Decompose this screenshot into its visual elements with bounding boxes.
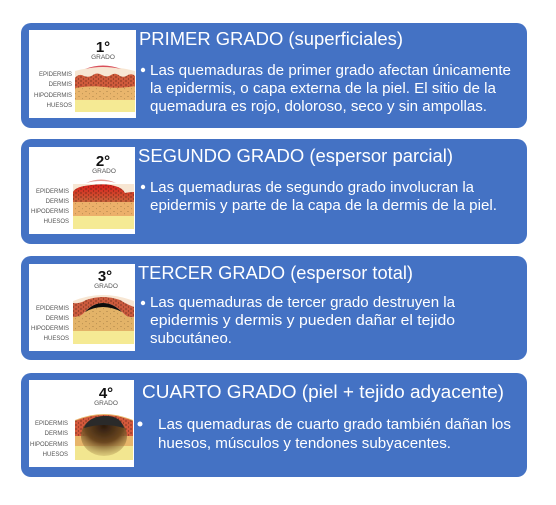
illustration: third degree burn: 3° [98, 268, 112, 285]
text block: epidermis y parte de la capa de la dermis de la piel. [150, 198, 497, 214]
illustration: fourth degree burn: HIPODERMIS [30, 442, 68, 448]
illustration: first degree burn: EPIDERMIS [39, 72, 72, 78]
illustration: second degree burn [29, 147, 135, 234]
panel: primer grado [21, 23, 527, 128]
illustration: fourth degree burn [29, 380, 134, 467]
illustration: second degree burn: 2° [96, 153, 110, 170]
illustration: first degree burn: HIPODERMIS [34, 93, 72, 99]
illustration: third degree burn: DERMIS [46, 316, 69, 322]
illustration: fourth degree burn: HUESOS [43, 452, 68, 458]
illustration: third degree burn: HUESOS [44, 336, 69, 342]
illustration: third degree burn: HIPODERMIS [31, 326, 69, 332]
illustration: fourth degree burn: GRADO [94, 400, 118, 407]
heading: CUARTO GRADO (piel + tejido adyacente) [142, 382, 504, 402]
text block [141, 295, 456, 347]
text block: subcutáneo. [150, 331, 232, 347]
illustration: second degree burn: HIPODERMIS [31, 209, 69, 215]
text block: Las quemaduras de primer grado afectan únicamente [150, 63, 511, 79]
illustration: fourth degree burn: EPIDERMIS [35, 421, 68, 427]
illustration: first degree burn: GRADO [91, 54, 115, 61]
illustration: first degree burn: DERMIS [49, 82, 72, 88]
text block: Las quemaduras de tercer grado destruyen la [150, 295, 456, 311]
panel: tercer grado [21, 256, 527, 360]
illustration: fourth degree burn: DERMIS [45, 431, 68, 437]
illustration: second degree burn: GRADO [92, 168, 116, 175]
text block: epidermis y dermis y pueden dañar el tejido [150, 313, 455, 329]
text block: quemadura es rojo, doloroso, seco y sin ampollas. [150, 99, 487, 115]
text block [138, 417, 511, 452]
text block [141, 63, 511, 115]
illustration: fourth degree burn: 4° [99, 385, 113, 402]
panel: cuarto grado [21, 373, 527, 477]
illustration: second degree burn: HUESOS [44, 219, 69, 225]
illustration: third degree burn: EPIDERMIS [36, 306, 69, 312]
illustration: first degree burn: HUESOS [47, 103, 72, 109]
text block: Las quemaduras de segundo grado involucran la [150, 180, 475, 196]
text block: huesos, músculos y tendones subyacentes. [158, 436, 451, 452]
text block: Las quemaduras de cuarto grado también dañan los [158, 417, 511, 433]
illustration: first degree burn [29, 30, 136, 118]
text block [141, 180, 497, 214]
illustration: third degree burn [29, 264, 135, 351]
illustration: first degree burn: 1° [96, 39, 110, 56]
text block: la epidermis, o capa externa de la piel. El sitio de la [150, 81, 497, 97]
heading: SEGUNDO GRADO (espersor parcial) [138, 146, 453, 166]
heading: PRIMER GRADO (superficiales) [139, 29, 403, 49]
heading: TERCER GRADO (espersor total) [138, 263, 413, 283]
illustration: third degree burn: GRADO [94, 283, 118, 290]
panel: segundo grado [21, 139, 527, 244]
illustration: second degree burn: DERMIS [46, 199, 69, 205]
illustration: second degree burn: EPIDERMIS [36, 189, 69, 195]
